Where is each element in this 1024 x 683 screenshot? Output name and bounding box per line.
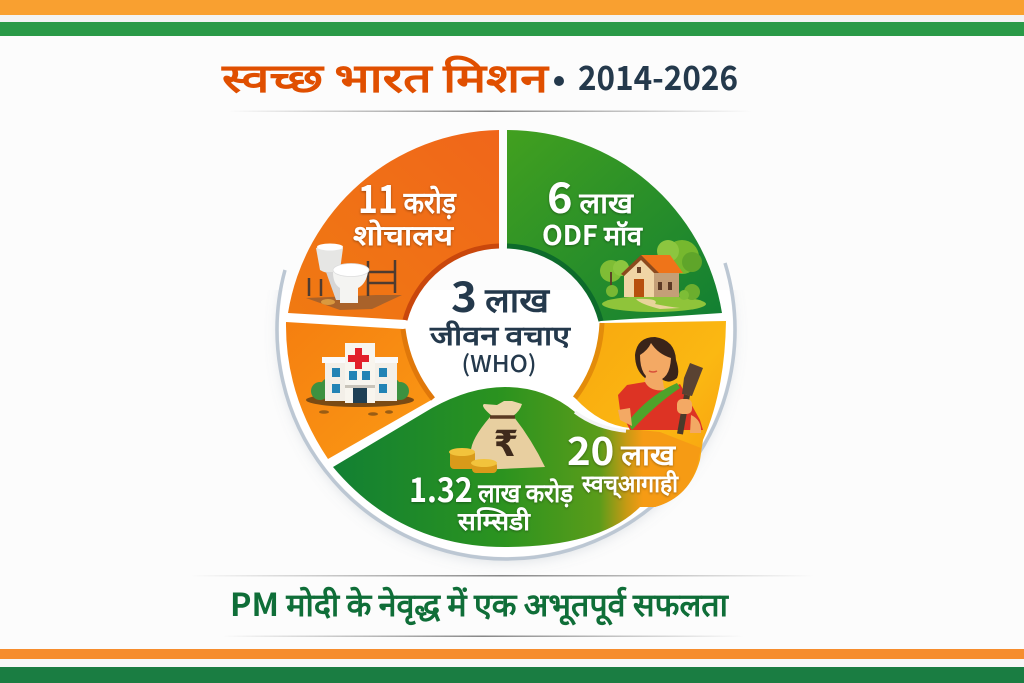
icon: hospital xyxy=(306,343,414,416)
icon: money bag: ₹ xyxy=(493,424,519,465)
label: 20 lakh volunteers xyxy=(567,421,679,499)
centre label: 3 लाख xyxy=(451,264,550,324)
icon: toilet xyxy=(306,244,402,310)
label: 11 crore toilets: शोचालय xyxy=(353,214,455,254)
label: 1.32 lakh crore subsidy xyxy=(409,464,574,538)
label: 20 lakh volunteers: 20 लाख xyxy=(567,421,676,476)
title xyxy=(221,46,738,104)
panel: hospital segment xyxy=(286,322,433,459)
label: 11 crore toilets: 11 करोड़ xyxy=(358,169,457,224)
label: 20 lakh volunteers: स्वच्आगाही xyxy=(581,464,679,499)
label: 6 lakh ODF villages xyxy=(542,165,643,253)
panel: toilets segment xyxy=(288,130,499,320)
donut chart xyxy=(277,103,735,559)
icon: coins xyxy=(449,448,497,473)
centre label xyxy=(429,264,571,379)
icon: woman with broom xyxy=(618,337,703,434)
label: 6 lakh ODF villages: ODF मॉव xyxy=(542,214,643,253)
footer tagline: PM मोदी के नेवृद्ध में एक अभूतपूर्व सफलता xyxy=(230,580,730,626)
icon: money bag xyxy=(471,401,545,469)
title: स्वच्छ भारत मिशन xyxy=(221,46,550,104)
centre label: जीवन वचाए xyxy=(429,314,571,353)
bottom tricolour band xyxy=(0,649,1024,683)
top tricolour band xyxy=(0,0,1024,36)
panel: ODF villages segment xyxy=(507,130,722,321)
outer ring xyxy=(274,262,738,566)
icon: village house xyxy=(600,240,706,312)
label: 6 lakh ODF villages: 6 लाख xyxy=(547,165,634,225)
label: 1.32 lakh crore subsidy: सम्सिडी xyxy=(457,502,532,538)
title: 2014-2026 xyxy=(578,52,738,100)
label: 11 crore toilets xyxy=(353,169,457,254)
panel: volunteers segment xyxy=(575,321,726,507)
centre label: (WHO) xyxy=(462,345,536,379)
label: 1.32 lakh crore subsidy: 1.32 लाख करोड़ xyxy=(409,464,574,512)
panel: subsidy segment xyxy=(333,387,701,547)
